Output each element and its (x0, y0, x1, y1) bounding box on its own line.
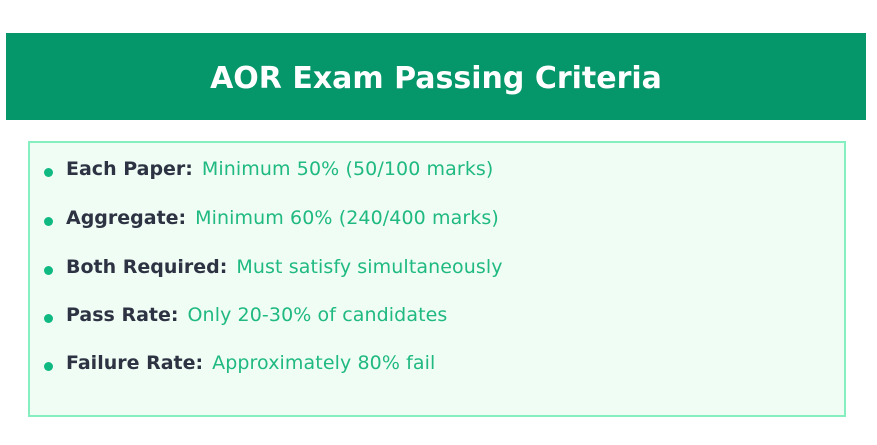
title (6, 33, 866, 120)
item: failure rate: Failure Rate: Approximately 80% fail (66, 352, 435, 374)
panel: criteria (28, 141, 846, 417)
item: each paper: Each Paper: Minimum 50% (50/100 marks) (66, 158, 493, 180)
item: pass rate: Pass Rate: Only 20-30% of candidates (66, 304, 447, 326)
item: aggregate: Aggregate: Minimum 60% (240/400 marks) (66, 207, 499, 229)
title: AOR Exam Passing Criteria (210, 61, 662, 96)
item: both required: Both Required: Must satisfy simultaneously (66, 256, 503, 278)
